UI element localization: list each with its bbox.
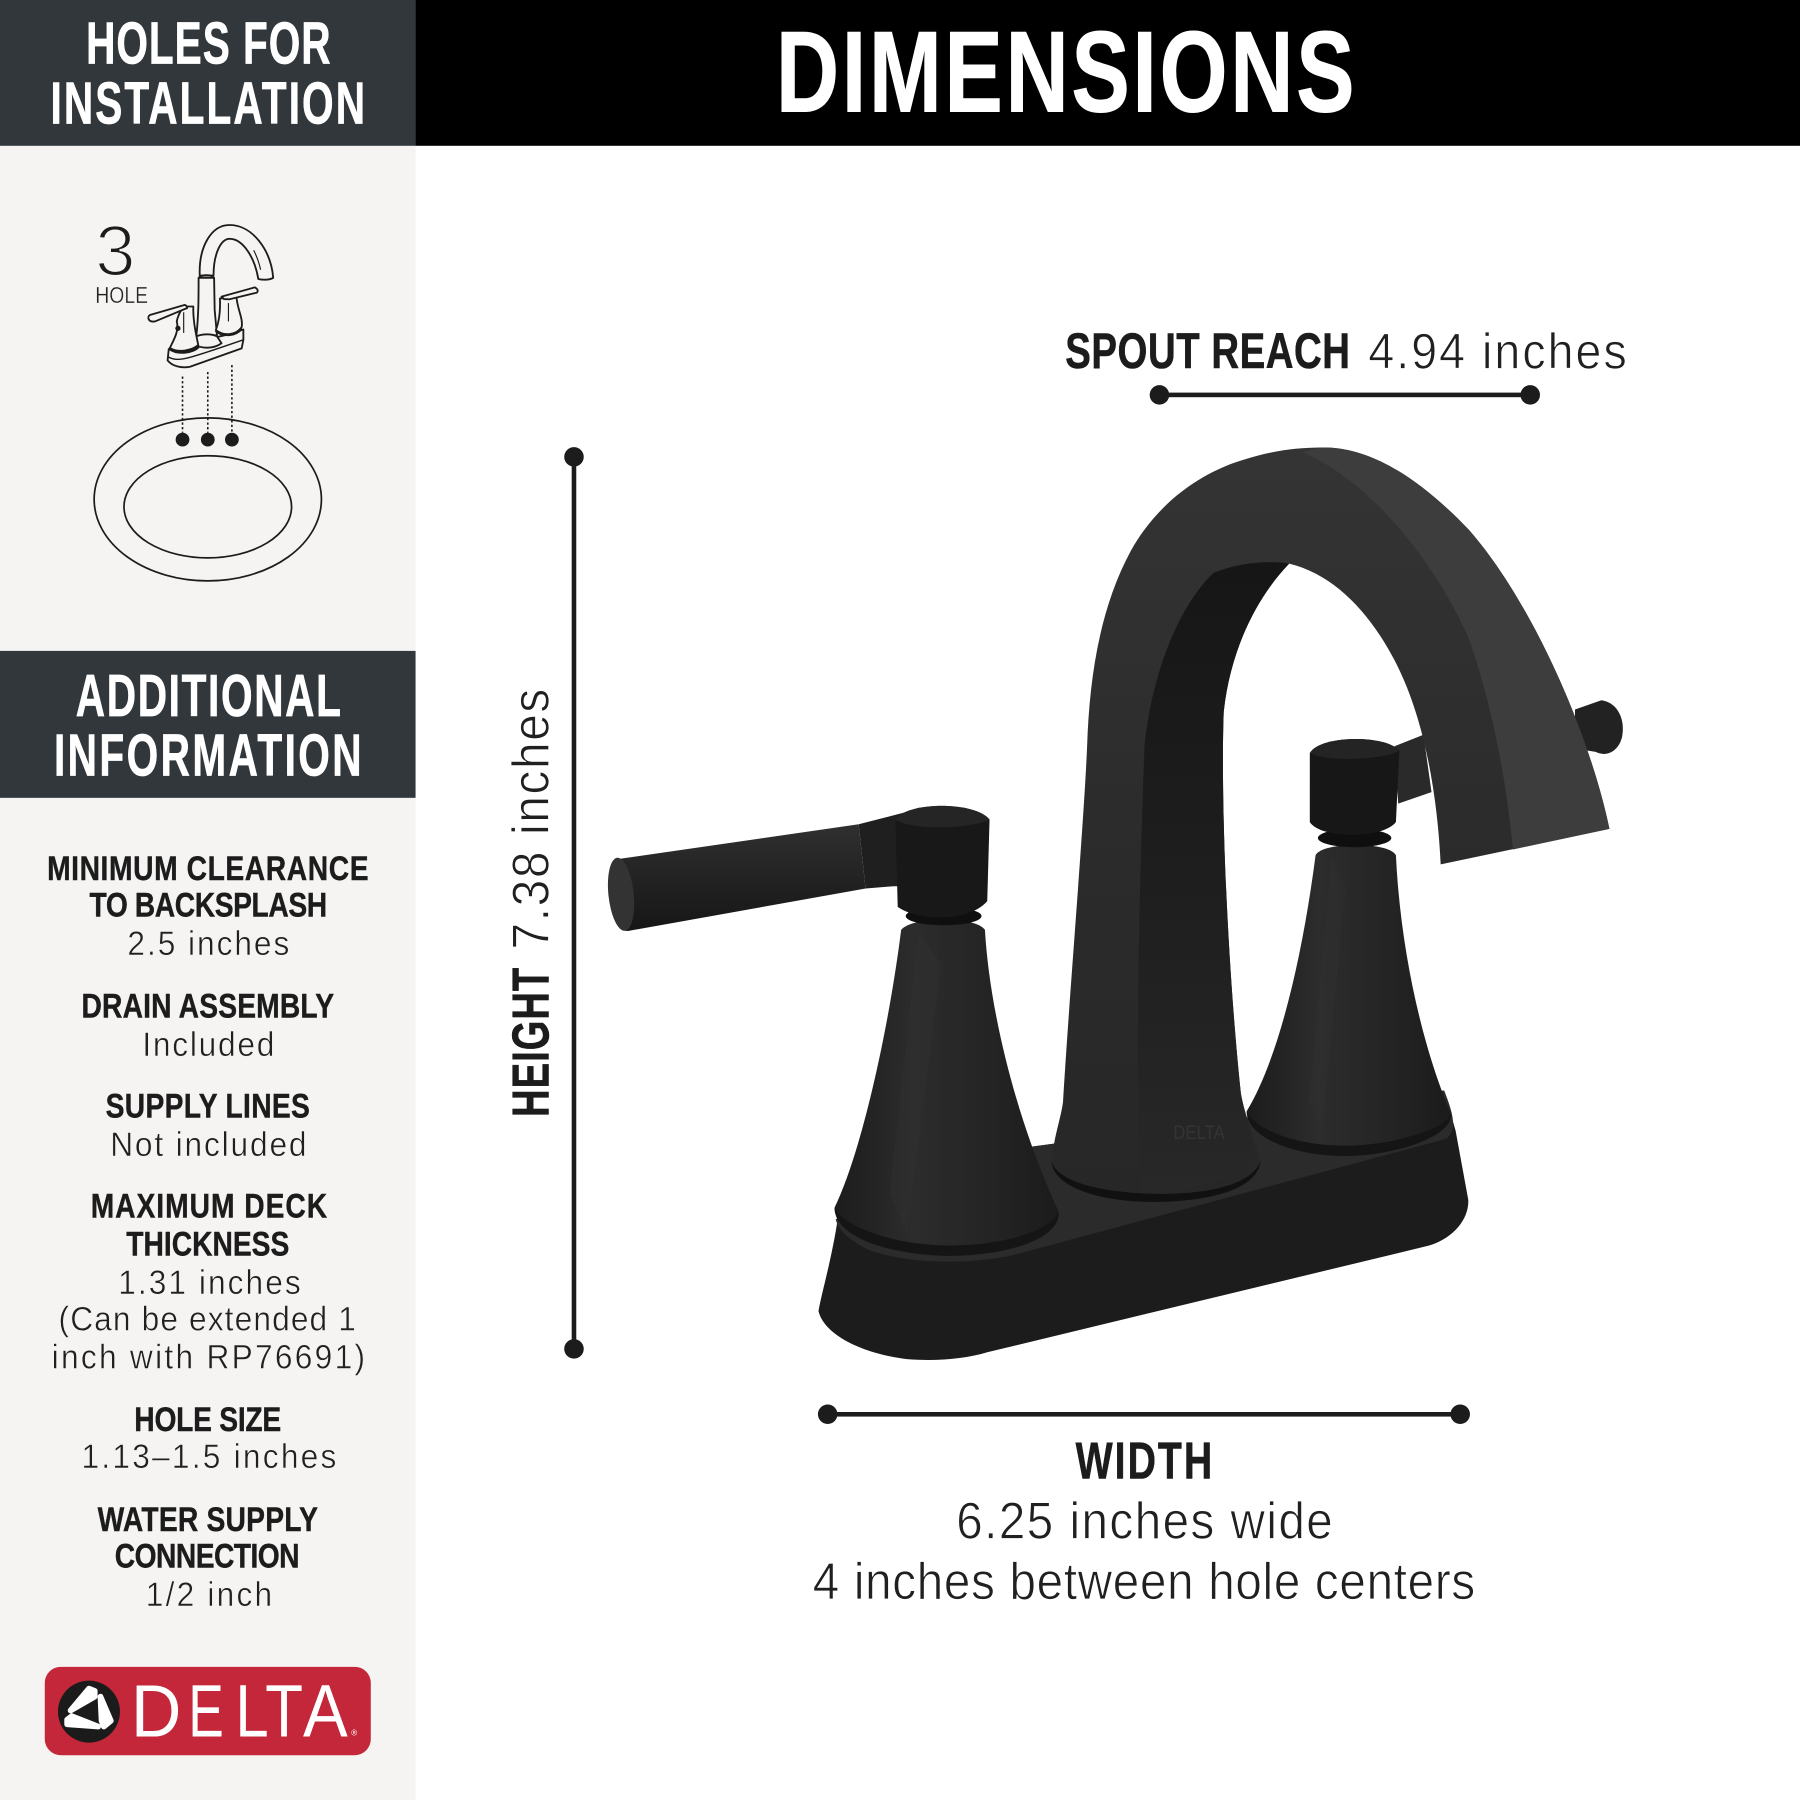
- center spout and column: [1052, 447, 1609, 1202]
- arrow: width line: [818, 1405, 1470, 1424]
- text block: maximum deck thickness: THICKNESS: [126, 1224, 289, 1263]
- text block: hole size: HOLE SIZE: [134, 1399, 281, 1439]
- text block: supply lines: SUPPLY LINES: [106, 1086, 310, 1125]
- heading: holes for installation: HOLES FOR: [86, 10, 331, 77]
- logo: Delta: E: [188, 1668, 224, 1752]
- dimension: width: WIDTH: [1076, 1431, 1212, 1490]
- text block: water supply connection: WATER SUPPLY: [98, 1499, 318, 1538]
- heading: holes for installation: [0, 0, 416, 146]
- label: 3 hole: 3: [95, 213, 135, 292]
- dimension: height: HEIGHT: [502, 968, 560, 1117]
- text block: maximum deck thickness: [52, 1186, 365, 1377]
- heading: additional information: [0, 651, 416, 798]
- logo: Delta: ®: [351, 1729, 357, 1738]
- dotted guide lines: [183, 365, 232, 433]
- text block: minimum clearance: MINIMUM CLEARANCE: [47, 848, 369, 888]
- text block: drain assembly: [82, 986, 334, 1064]
- title bar: dimensions: DIMENSIONS: [776, 8, 1354, 136]
- text block: maximum deck thickness: inch with RP76691): [52, 1338, 365, 1377]
- icon: sink: [94, 418, 321, 581]
- faucet base: [818, 1091, 1468, 1360]
- right handle: [1247, 735, 1451, 1156]
- dimension: spout reach: 4.94 inches: [1368, 324, 1627, 380]
- dimension: width: [813, 1405, 1475, 1611]
- logo: Delta: L: [235, 1668, 269, 1752]
- dimension: width: 4 inches between hole centers: [813, 1552, 1475, 1611]
- icon: 3 hole faucet and sink diagram: [94, 213, 321, 581]
- logo: Delta: [45, 1667, 371, 1755]
- text block: maximum deck thickness: MAXIMUM DECK: [91, 1186, 327, 1225]
- text block: drain assembly: Included: [142, 1026, 274, 1064]
- heading: additional information: INFORMATION: [54, 722, 362, 788]
- arrow: spout reach line: [1150, 385, 1540, 405]
- arrow: height line: [564, 447, 584, 1359]
- dimension: height: [502, 447, 584, 1359]
- dimension: spout reach: SPOUT REACH: [1065, 322, 1350, 379]
- text block: drain assembly: DRAIN ASSEMBLY: [82, 986, 334, 1025]
- dimension: height: 7.38 inches: [502, 689, 560, 949]
- text block: hole size: [82, 1399, 336, 1477]
- product image: black two-handle faucet: [605, 447, 1623, 1360]
- right lever tip behind spout: [1575, 700, 1623, 754]
- dimension: width: 6.25 inches wide: [956, 1491, 1333, 1550]
- text block: supply lines: Not included: [110, 1126, 307, 1164]
- text block: maximum deck thickness: (Can be extended 1: [59, 1300, 356, 1339]
- panel: left sidebar: [0, 0, 416, 1800]
- logo: Delta: T: [265, 1668, 303, 1752]
- text block: hole size: 1.13–1.5 inches: [82, 1438, 336, 1477]
- embossed brand mark: DELTA: [1173, 1122, 1225, 1144]
- label: 3 hole: [95, 213, 148, 308]
- text block: water supply connection: [98, 1499, 318, 1614]
- logo: Delta: D: [131, 1668, 181, 1752]
- text block: maximum deck thickness: 1.31 inches: [118, 1264, 301, 1302]
- logo: Delta: A: [303, 1668, 348, 1752]
- heading: holes for installation: INSTALLATION: [51, 70, 365, 136]
- icon: mini faucet: [148, 225, 273, 367]
- text block: supply lines: [106, 1086, 310, 1164]
- left handle: [605, 806, 1059, 1256]
- title bar: dimensions: [416, 0, 1800, 146]
- label: 3 hole: HOLE: [95, 282, 148, 308]
- dimension: spout reach: [1065, 322, 1627, 405]
- text block: water supply connection: 1/2 inch: [146, 1576, 272, 1614]
- heading: additional information: ADDITIONAL: [76, 662, 341, 729]
- text block: minimum clearance: 2.5 inches: [127, 925, 289, 963]
- text block: water supply connection: CONNECTION: [115, 1536, 300, 1575]
- text block: minimum clearance: [47, 848, 369, 963]
- text block: minimum clearance: TO BACKSPLASH: [90, 885, 327, 924]
